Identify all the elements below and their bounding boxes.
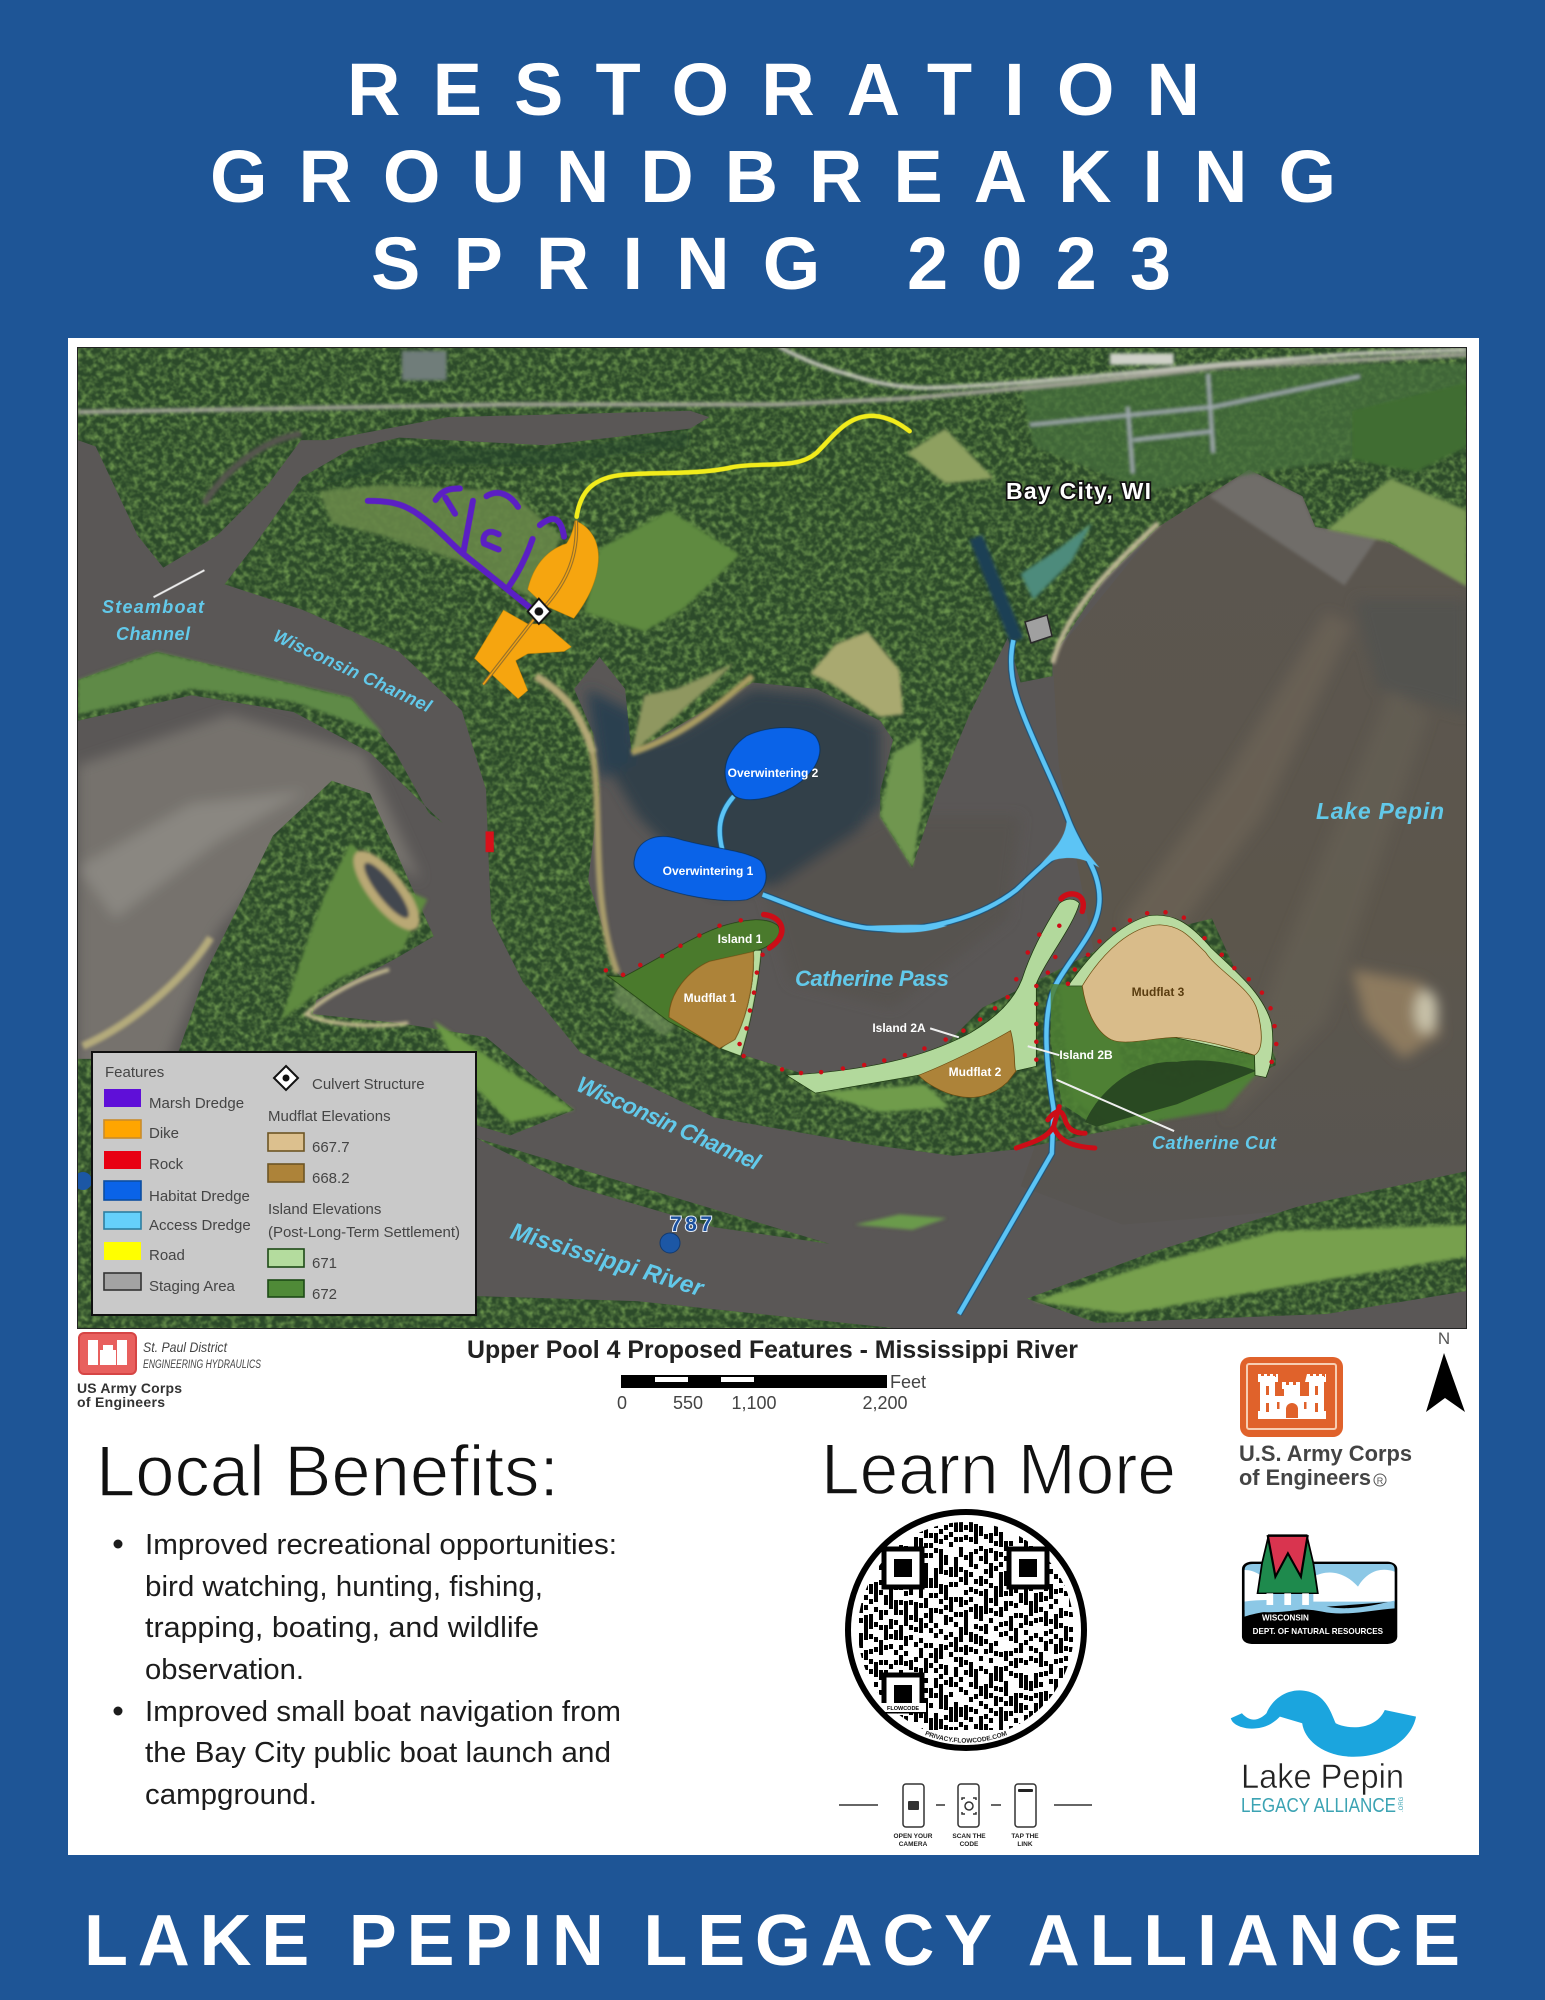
river mile marker [660, 1213, 712, 1253]
title: SPRING 2023 [371, 222, 1171, 305]
QR instructions: SCAN THE [952, 1833, 986, 1840]
QR code: PRIVACY.FLOWCODE.COM [925, 1730, 1007, 1743]
Wisconsin DNR logo: WISCONSIN [1262, 1614, 1309, 1623]
north arrow [1426, 1329, 1465, 1412]
town and fields [1021, 364, 1467, 491]
scale bar: 550 [673, 1393, 703, 1413]
footer: LAKE PEPIN LEGACY ALLIANCE [84, 1901, 1460, 1981]
local benefits list: trapping, boating, and wildlife [145, 1612, 539, 1644]
scale bar: 0 [617, 1393, 627, 1413]
map legend: 672 [312, 1286, 337, 1303]
map legend [92, 1052, 476, 1315]
map legend: 667.7 [312, 1139, 350, 1156]
map legend: (Post-Long-Term Settlement) [268, 1224, 460, 1241]
local benefits list: Improved small boat navigation from [145, 1696, 621, 1728]
Lake Pepin Legacy Alliance logo: LEGACY ALLIANCE [1241, 1795, 1396, 1817]
scale bar: 1,100 [731, 1393, 777, 1413]
learn more heading: Learn More [821, 1430, 1176, 1510]
forest darkening strip along channels [319, 431, 689, 485]
island 2B land [1051, 984, 1257, 1127]
scale bar: 2,200 [862, 1393, 908, 1413]
lake tile haze [1209, 469, 1378, 586]
water labels: Channel [116, 624, 191, 644]
overwintering dredge areas [634, 728, 820, 901]
US Army Corps of Engineers logo [1239, 1357, 1412, 1490]
feature labels: Island 2B [1059, 1048, 1113, 1062]
title: RESTORATION [347, 48, 1200, 131]
QR instructions: OPEN YOUR [894, 1833, 933, 1840]
map legend: Road [149, 1247, 185, 1264]
Lake Pepin Legacy Alliance logo: Lake Pepin [1241, 1758, 1404, 1796]
leader lines [930, 1028, 1174, 1131]
road feature [577, 416, 910, 517]
feature labels: Overwintering 1 [663, 864, 754, 878]
map legend: Mudflat Elevations [268, 1108, 391, 1125]
Lake Pepin Legacy Alliance logo [1231, 1690, 1416, 1817]
water labels [102, 597, 1444, 1303]
forest on island 2B [1085, 1060, 1256, 1127]
QR instructions: CAMERA [899, 1841, 928, 1848]
west-side feature frame [154, 488, 598, 852]
town label: Bay City, WI [1006, 478, 1151, 504]
map legend: Dike [149, 1125, 179, 1142]
Lake Pepin Legacy Alliance logo: .ORG [1399, 1796, 1405, 1812]
map border [77, 347, 1467, 1329]
map legend: Staging Area [149, 1278, 236, 1295]
roads and town [78, 355, 1467, 412]
dike [474, 521, 598, 699]
marsh dredge [368, 488, 564, 608]
scale bar [617, 1372, 926, 1413]
rock edge protection [606, 894, 1276, 1148]
staging area [1025, 615, 1052, 643]
small USACE district logo: US Army Corps [77, 1380, 182, 1396]
water labels: Catherine Pass [795, 966, 949, 991]
US Army Corps of Engineers logo: U.S. Army Corps [1239, 1441, 1412, 1466]
map legend: Rock [149, 1156, 184, 1173]
water labels: Wisconsin Channel [270, 625, 436, 717]
local benefits list: the Bay City public boat launch and [145, 1737, 611, 1769]
local benefits list: bird watching, hunting, fishing, [145, 1571, 543, 1603]
rock [486, 831, 494, 852]
water labels: Steamboat [102, 597, 205, 617]
feature labels: Mudflat 1 [684, 991, 737, 1005]
back channels [976, 537, 1017, 640]
water labels: Mississippi River [507, 1218, 708, 1303]
local benefits list: Improved recreational opportunities: [145, 1529, 617, 1561]
scale bar: Feet [890, 1372, 926, 1392]
QR instructions: TAP THE [1011, 1833, 1039, 1840]
map legend: Island Elevations [268, 1201, 381, 1218]
land masses with forest texture [78, 347, 1467, 1328]
local benefits list: observation. [145, 1654, 304, 1686]
east-side feature frame [606, 640, 1276, 1314]
title: GROUNDBREAKING [210, 135, 1336, 218]
small USACE district logo [77, 1333, 261, 1410]
local benefits list: campground. [145, 1779, 317, 1811]
map: aerial view with proposed features [74, 347, 1467, 1329]
Wisconsin DNR logo: DEPT. OF NATURAL RESOURCES [1253, 1627, 1383, 1637]
QR instructions [839, 1784, 1092, 1848]
feature labels: Island 1 [718, 932, 763, 946]
island 2A and mudflat 2 [787, 899, 1079, 1097]
map legend: Access Dredge [149, 1217, 251, 1234]
feature labels [663, 766, 1185, 1079]
feature labels: Mudflat 2 [949, 1065, 1002, 1079]
QR code [845, 1509, 1087, 1751]
QR code: FLOWCODE [887, 1706, 919, 1712]
map legend: Habitat Dredge [149, 1188, 250, 1205]
water labels: Catherine Cut [1152, 1133, 1277, 1153]
Wisconsin DNR logo [1242, 1535, 1397, 1644]
title [210, 48, 1336, 305]
local benefits list [114, 1529, 621, 1811]
QR instructions: LINK [1017, 1841, 1033, 1848]
map title: Upper Pool 4 Proposed Features - Mississippi River [467, 1336, 1078, 1364]
small USACE district logo: of Engineers [77, 1394, 165, 1410]
white content panel [68, 338, 1479, 1855]
feature labels: Overwintering 2 [728, 766, 819, 780]
access dredge channels [720, 640, 1099, 1314]
river mile marker: 787 [670, 1213, 712, 1236]
feature labels: Mudflat 3 [1132, 985, 1185, 999]
map legend: 671 [312, 1255, 337, 1272]
US Army Corps of Engineers logo: R [1377, 1476, 1384, 1486]
map legend: Culvert Structure [312, 1076, 425, 1093]
US Army Corps of Engineers logo: of Engineers [1239, 1465, 1371, 1490]
north arrow: N [1438, 1329, 1450, 1348]
water labels: Lake Pepin [1316, 798, 1444, 824]
water labels: Wisconsin Channel [573, 1071, 765, 1175]
small USACE district logo: St. Paul District [143, 1339, 228, 1355]
local benefits heading: Local Benefits: [96, 1432, 559, 1512]
map legend: Features [105, 1064, 164, 1081]
partly hidden mile marker [74, 1172, 92, 1190]
aerial background [78, 347, 1467, 1328]
map legend: 668.2 [312, 1170, 350, 1187]
steamboat leader [154, 570, 204, 597]
feature labels: Island 2A [872, 1021, 926, 1035]
map legend: Marsh Dredge [149, 1095, 244, 1112]
grass and marsh patches [584, 510, 740, 631]
QR instructions: CODE [960, 1841, 979, 1848]
small USACE district logo: ENGINEERING HYDRAULICS [143, 1359, 261, 1371]
sand bars [588, 734, 617, 973]
mudflat 3 with island edge [1068, 915, 1273, 1077]
culvert structure [528, 599, 551, 624]
island 1 and mudflat 1 [608, 920, 780, 1056]
